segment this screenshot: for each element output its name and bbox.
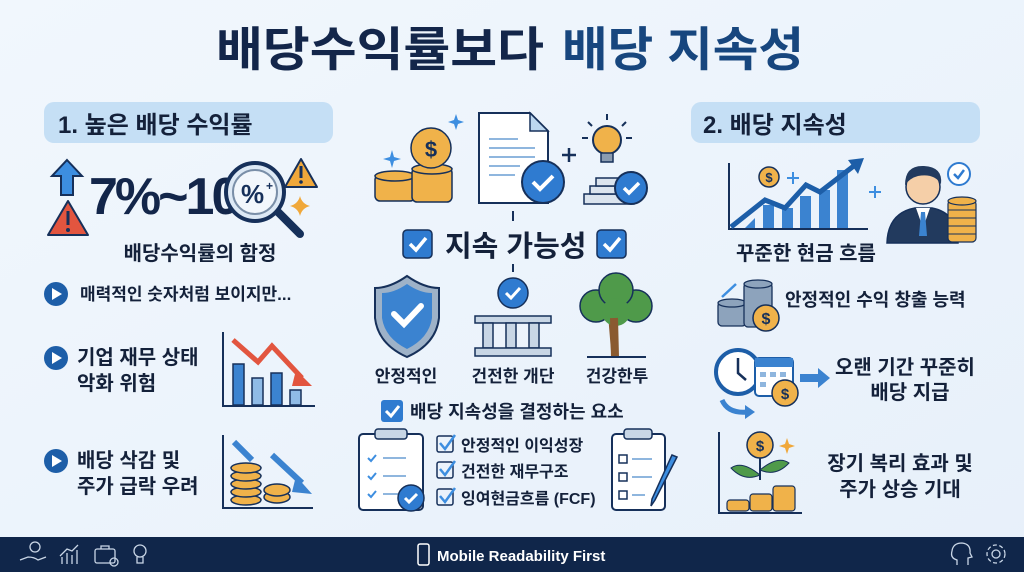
yield range text: 7%~10 — [89, 168, 238, 226]
factor list: 안정적인 이익성장 — [461, 437, 583, 455]
panel: left header: 1. 높은 배당 수익률 — [58, 112, 253, 139]
icon: growing plant chart — [719, 432, 802, 513]
icon: growing plant chart: $ — [756, 438, 765, 455]
center labels: 안정적인 — [375, 367, 437, 386]
icon: magnifier: + — [266, 179, 273, 193]
icon: coin stacks center — [375, 114, 464, 202]
sustainability heading: 지속 가능성 — [445, 230, 586, 263]
icon: coin stacks right: $ — [762, 311, 771, 328]
footer icons right — [952, 543, 1005, 565]
icon: rising chart — [729, 158, 881, 229]
footer tagline: Mobile Readability First — [437, 548, 605, 565]
center labels: 건강한투 — [586, 367, 648, 386]
icon: rising chart: $ — [765, 170, 773, 185]
icon: document with check — [479, 113, 564, 203]
icon: plus — [562, 148, 576, 162]
icon: clock, calendar, arrow: $ — [781, 386, 790, 403]
bullet 3 — [44, 449, 199, 498]
icon: coin stacks center: $ — [425, 137, 437, 162]
bullet 3: 배당 삭감 및 — [77, 449, 180, 472]
icon: businessman with coins — [887, 163, 976, 243]
center labels: 건전한 개단 — [472, 367, 555, 386]
trap label: 배당수익률의 함정 — [124, 242, 276, 265]
long-term dividend label: 오랜 기간 꾸준히 — [835, 356, 975, 379]
footer — [0, 537, 1024, 572]
factor list: 건전한 재무구조 — [461, 463, 569, 481]
factor list — [437, 435, 596, 508]
sustainability heading — [403, 230, 626, 263]
bullet 2: 악화 위험 — [77, 372, 156, 395]
factor list: 잉여현금흐름 (FCF) — [461, 490, 596, 508]
icon: magnifier: % — [241, 179, 264, 209]
icon: coin stacks right — [718, 280, 779, 331]
icon: up arrow — [52, 160, 82, 195]
title: 배당 지속성 — [562, 23, 804, 76]
icon: clipboard left — [359, 429, 424, 511]
icon: red warning — [48, 201, 88, 235]
bullet 1 — [44, 282, 291, 306]
icon: pillars — [475, 278, 551, 356]
earnings label: 안정적인 수익 창출 능력 — [785, 290, 966, 310]
icon: magnifier — [226, 163, 300, 234]
bullet 2 — [44, 346, 199, 395]
icon: bulb with steps and check — [582, 114, 647, 204]
icon: tree — [580, 273, 652, 357]
icon: shield — [375, 276, 439, 357]
icon: clipboard right — [612, 429, 677, 510]
title — [216, 23, 804, 76]
title: 배당수익률보다 — [216, 23, 544, 76]
long-term dividend label — [835, 356, 975, 404]
long-term dividend label: 배당 지급 — [870, 381, 950, 404]
compounding label: 장기 복리 효과 및 — [827, 452, 973, 475]
bullet 3: 주가 급락 우려 — [77, 475, 199, 498]
icon: orange warning — [285, 159, 317, 187]
bullet 1: 매력적인 숫자처럼 보이지만... — [80, 285, 291, 304]
chart: crashing coins — [223, 435, 313, 508]
panel: right header — [691, 102, 980, 143]
chart: declining bars — [223, 332, 315, 406]
panel: right header: 2. 배당 지속성 — [703, 112, 847, 139]
factors heading: 배당 지속성을 결정하는 요소 — [410, 402, 624, 422]
panel: left header — [44, 102, 333, 143]
icon: sparkle — [290, 196, 310, 216]
compounding label: 주가 상승 기대 — [839, 478, 961, 501]
footer icons left — [20, 542, 146, 566]
compounding label — [827, 452, 973, 501]
cash flow label: 꾸준한 현금 흐름 — [736, 242, 876, 265]
center labels — [375, 367, 648, 386]
icon: clock, calendar, arrow — [716, 350, 830, 419]
bullet 2: 기업 재무 상태 — [77, 346, 199, 369]
